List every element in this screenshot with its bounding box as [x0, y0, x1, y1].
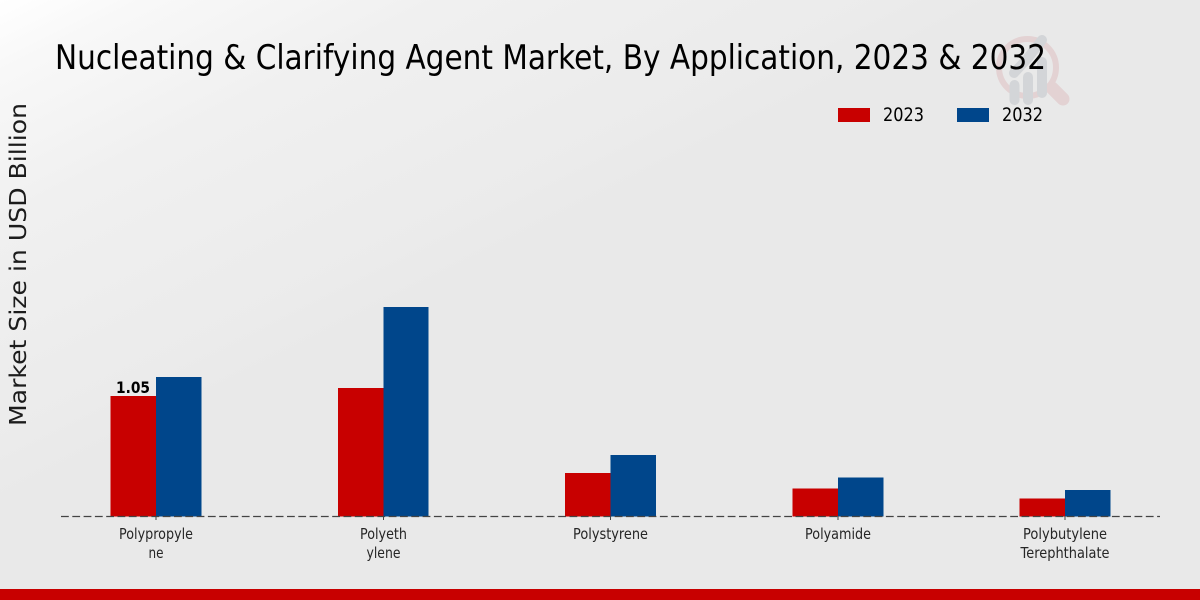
group: Polyethylene	[338, 307, 428, 516]
y axis label: Market Size in USD Billion	[4, 103, 32, 426]
label: Polybutylene Terephthalate: Terephthalate	[1020, 544, 1110, 562]
x axis ticks	[156, 516, 1065, 520]
label: Polypropylene: ne	[148, 544, 164, 562]
label: Polybutylene Terephthalate	[1020, 525, 1110, 562]
label: Polypropylene	[119, 525, 193, 562]
x axis baseline	[61, 516, 1160, 518]
footer bar	[0, 589, 1200, 600]
legend: 2023	[838, 104, 924, 126]
legend: 2032: 2032	[1002, 104, 1043, 126]
legend: 2023: 2023	[883, 104, 924, 126]
label: Polypropylene: Polypropyle	[119, 525, 193, 543]
label: Polybutylene Terephthalate: Polybutylene	[1023, 525, 1107, 543]
x axis labels	[119, 525, 1110, 562]
value label: 1.05	[116, 378, 150, 397]
title: Nucleating & Clarifying Agent Market, By Application, 2023 & 2032	[55, 38, 1046, 78]
label: Polyamide: Polyamide	[805, 525, 871, 543]
bar chart	[110, 307, 1110, 516]
watermark logo	[999, 39, 1063, 100]
group: Polyamide	[792, 478, 884, 516]
legend: 2032	[957, 104, 1043, 126]
label: Polyethylene: Polyeth	[360, 525, 407, 543]
group: Polystyrene	[565, 455, 656, 516]
label: Polystyrene: Polystyrene	[573, 525, 648, 543]
label: Polyethylene: ylene	[366, 544, 400, 562]
group: Polypropylene	[110, 377, 202, 516]
label: Polyethylene	[360, 525, 407, 562]
group: Polybutylene Terephthalate	[1020, 490, 1110, 516]
legend	[838, 104, 1043, 126]
